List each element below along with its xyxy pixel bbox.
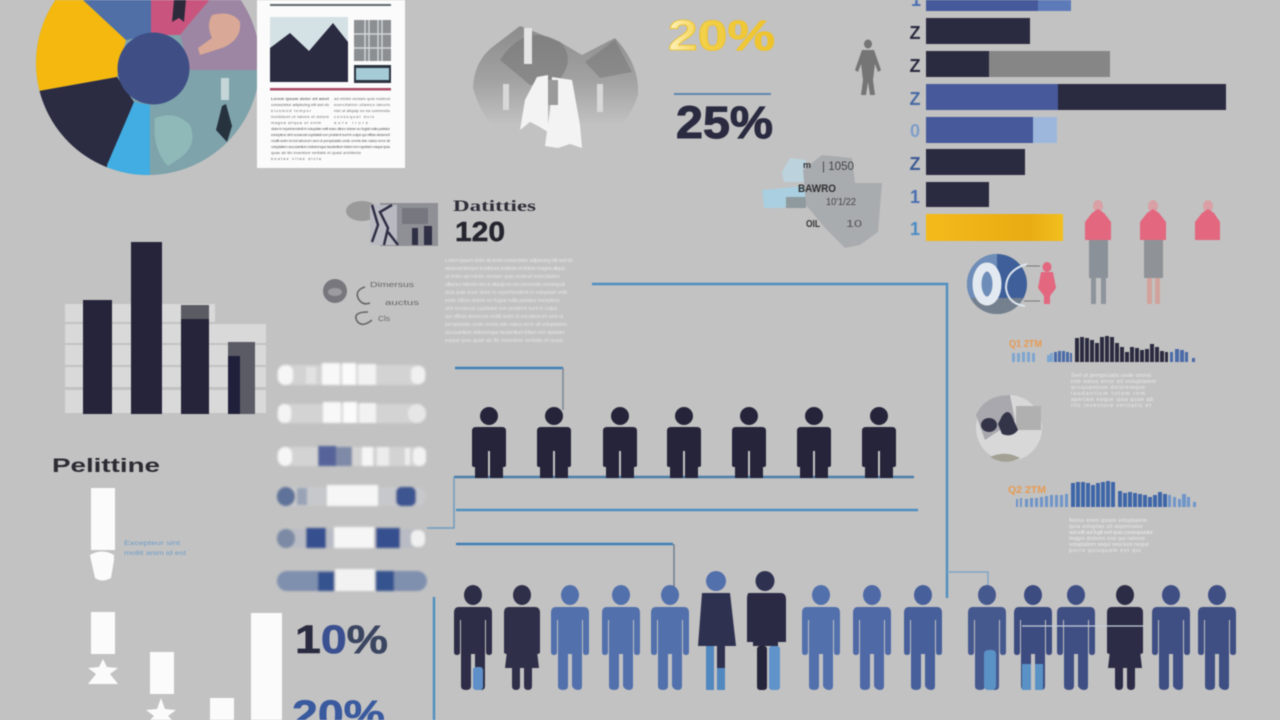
caption: quia voluptas sit aspernatur <box>1069 524 1143 530</box>
icon: gray person <box>855 40 881 95</box>
caption: porro quisquam est qui <box>1069 548 1141 554</box>
document text: ad minim veniam quis nostrud <box>334 96 390 101</box>
center text block: sint occaecat cupidatat non proident sunt in culpa <box>445 306 558 312</box>
document text: aute irure <box>334 120 369 125</box>
lungs illustration <box>473 26 638 150</box>
document text <box>271 96 391 161</box>
caption: iste natus error sit voluptatem <box>1071 379 1156 385</box>
figure 2 <box>1140 200 1166 304</box>
center text block: ullamco laboris nisi ut aliquip ex ea commodo consequat <box>445 282 565 288</box>
heading: Datitties: Datitties <box>453 198 536 215</box>
caption <box>1069 518 1153 554</box>
center text block: eiusmod tempor incididunt ut labore et dolore magna aliqua <box>445 266 566 272</box>
figure 12 <box>1014 585 1052 690</box>
center text block: qui officia deserunt mollit anim id est laborum sed ut <box>445 314 563 320</box>
pink figure <box>1038 262 1056 304</box>
document text: quae ab illo inventore veritatis et quasi architecto <box>271 150 362 155</box>
bar labels: Z <box>910 23 920 43</box>
figure 5 <box>651 585 689 690</box>
figure 9 <box>853 585 891 690</box>
horizontal bar chart <box>910 0 1226 241</box>
region map: BAWRO <box>798 183 836 195</box>
caption: voluptatem sequi nesciunt neque <box>1069 542 1149 548</box>
document mini table <box>354 20 391 83</box>
document area chart <box>270 17 348 82</box>
small icon with notes: auctus <box>385 300 420 307</box>
caption: aut odit aut fugit sed quia consequuntur <box>1069 530 1153 536</box>
figure 6 <box>698 571 736 690</box>
stat: 20%: 20% <box>668 12 775 60</box>
document text: incididunt ut labore et dolore <box>271 114 330 119</box>
center text block: eaque ipsa quae ab illo inventore veritatis et quasi <box>445 338 563 344</box>
small blue note <box>124 540 186 557</box>
document text: consequat duis <box>334 114 374 119</box>
caption: Sed ut perspiciatis unde omnis <box>1071 373 1151 379</box>
center text block: duis aute irure dolor in reprehenderit in voluptate velit <box>445 290 567 296</box>
region map: OIL <box>806 219 820 230</box>
figure 11 <box>968 585 1006 690</box>
figure 3 <box>1195 200 1220 240</box>
microscope circle <box>976 395 1042 462</box>
document text: mollit anim id est laborum sed ut perspiciatis unde omnis iste natus error sit <box>271 138 391 143</box>
pill row 6 <box>277 569 427 591</box>
small icon with notes: Dimersus <box>370 282 415 289</box>
small blue note: mollit anim id est <box>124 550 186 557</box>
caption: magni dolores eos qui ratione <box>1069 536 1145 542</box>
figure 2 <box>504 585 540 690</box>
center text block: accusantium doloremque laudantium totam rem aperiam <box>445 330 565 336</box>
caption: illo inventore veritatis et <box>1071 403 1151 409</box>
region map <box>762 155 882 248</box>
document text: consectetur adipiscing elit sed do <box>271 102 330 107</box>
document text: exercitation ullamco laboris <box>334 102 390 107</box>
figure 14 <box>1107 585 1143 690</box>
row of blue figures <box>454 571 1236 690</box>
document text: nisi ut aliquip ex ea commodo <box>334 108 391 113</box>
stat divider <box>674 93 771 95</box>
pill row 3 <box>277 446 426 466</box>
figure 13 <box>1057 585 1095 690</box>
bars <box>926 0 1226 241</box>
document thumbnail <box>257 0 405 168</box>
center text block: perspiciatis unde omnis iste natus error sit voluptatem <box>445 322 567 328</box>
figure 8 <box>802 585 840 690</box>
small bar chart 1 <box>1009 336 1195 409</box>
white pictogram column with cup <box>90 488 115 580</box>
small icon with notes <box>323 279 420 324</box>
white bar 3 <box>210 698 234 720</box>
small blue note: Excepteur sint <box>124 540 180 547</box>
bar labels: Z <box>910 154 920 174</box>
label: Q2 2TM <box>1008 485 1046 496</box>
document text: eiusmod tempor <box>271 108 312 113</box>
document text: excepteur sint occaecat cupidatat non proident sunt in culpa qui officia deserunt <box>271 132 391 137</box>
bar labels <box>910 0 921 239</box>
caption <box>1071 373 1156 409</box>
pie chart <box>35 0 258 176</box>
region map: m <box>803 160 811 170</box>
region map: | 1050 <box>822 159 854 173</box>
row of dark figures <box>472 407 896 478</box>
document text: magna aliqua ut enim <box>271 120 322 125</box>
white bar 4 <box>251 613 282 720</box>
pill row 5 <box>277 527 426 548</box>
red figures <box>1085 200 1220 304</box>
pill row 4 <box>277 485 426 506</box>
bar labels: 1 <box>910 219 920 239</box>
document text: Lorem ipsum dolor sit amet <box>271 96 330 101</box>
figure 7 <box>747 571 786 690</box>
document text: beatae vitae dicta <box>271 156 322 161</box>
figure 4 <box>602 585 640 690</box>
heading: Pelittine: Pelittine <box>52 456 160 477</box>
caption: laudantium totam rem <box>1071 391 1145 397</box>
figure 1 <box>454 585 492 690</box>
caption: Nemo enim ipsam voluptatem <box>1069 518 1147 524</box>
region map: 10 <box>846 219 863 230</box>
bar labels: Z <box>910 89 920 109</box>
pill row 1 <box>277 363 426 385</box>
center text block: esse cillum dolore eu fugiat nulla pariatur excepteur <box>445 298 560 304</box>
figure 10 <box>904 585 942 690</box>
caption: aperiam eaque ipsa quae ab <box>1071 397 1153 403</box>
small bar chart 2 <box>1008 481 1196 554</box>
stat: 10%: 10% <box>295 618 388 662</box>
white bar with star 1 <box>88 612 118 684</box>
photo thumbnail <box>346 201 438 246</box>
center text block: Lorem ipsum dolor sit amet consectetur adipiscing elit sed do <box>445 258 573 264</box>
chart grid <box>65 304 266 413</box>
connector lines <box>427 284 988 720</box>
stat: 120: 120 <box>455 216 505 247</box>
pill row 2 <box>277 402 426 423</box>
column chart <box>65 242 266 414</box>
stat: 25%: 25% <box>676 97 773 148</box>
figure crossbar <box>1022 625 1144 627</box>
pie hub <box>118 32 190 104</box>
caption: accusantium doloremque <box>1071 385 1145 391</box>
bar labels: 0 <box>910 121 920 141</box>
figure 16 <box>1198 585 1236 690</box>
small icon with notes: Cls <box>378 316 391 323</box>
globe icon with pink figure <box>967 254 1056 318</box>
pill list <box>277 363 427 591</box>
figure 1 <box>1085 200 1111 304</box>
region map: 10'1/22 <box>826 197 856 208</box>
figure 15 <box>1152 585 1190 690</box>
label: Q1 2TM <box>1009 339 1042 350</box>
center text block: ut enim ad minim veniam quis nostrud exercitation <box>445 274 560 280</box>
center text block <box>445 258 573 344</box>
pie icons <box>155 0 240 166</box>
document text: voluptatem accusantium doloremque laudantium totam rem aperiam eaque ipsa <box>271 144 391 149</box>
bar labels: 1 <box>910 187 920 207</box>
white bar with star 2 <box>146 652 176 720</box>
figure 3 <box>551 585 589 690</box>
document text: dolor in reprehenderit in voluptate velit esse cillum dolore eu fugiat nulla pariatur <box>271 126 391 131</box>
bar labels: Z <box>910 56 920 76</box>
